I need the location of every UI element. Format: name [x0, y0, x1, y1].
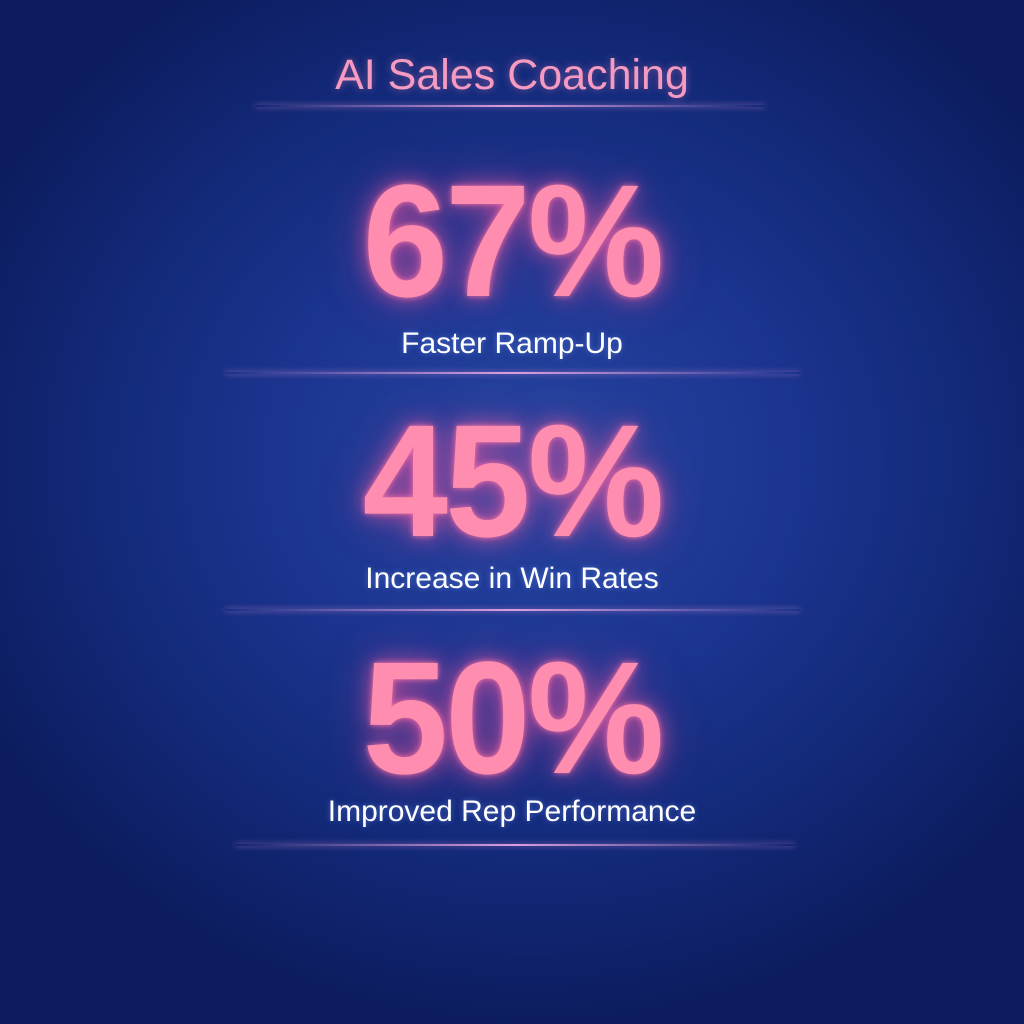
- number 67%: 67%: [363, 151, 661, 330]
- number 50%: 50%: [363, 628, 661, 807]
- label: rep performance: Improved Rep Performance: [328, 795, 696, 828]
- title: AI Sales Coaching: [335, 51, 689, 99]
- number 45%: 45%: [363, 391, 661, 570]
- label: faster ramp-up: Faster Ramp-Up: [401, 327, 623, 360]
- label: win rates: Increase in Win Rates: [365, 562, 659, 595]
